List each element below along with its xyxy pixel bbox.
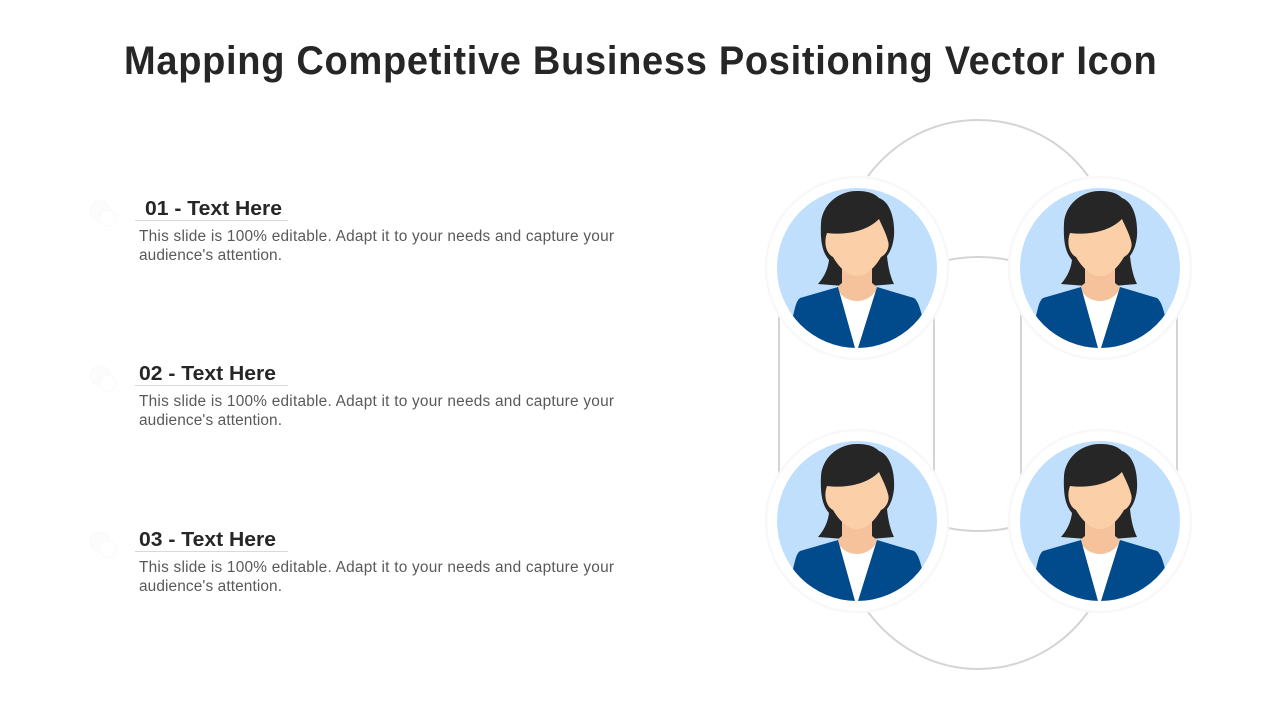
body text 1: This slide is 100% editable. Adapt it to your needs and capture your — [139, 228, 614, 245]
body text 3: This slide is 100% editable. Adapt it to your needs and capture your — [139, 559, 614, 576]
body text 3: audience's attention. — [139, 578, 282, 595]
heading 3: 03 - Text Here — [139, 529, 276, 551]
title: Mapping Competitive Business Positioning Vector Icon — [124, 39, 1157, 83]
text block 2 — [90, 363, 614, 429]
icon: faint bullet 1 — [90, 201, 116, 226]
text block 1 — [90, 198, 614, 264]
avatar: bottom left — [777, 441, 949, 612]
body text 1: audience's attention. — [139, 247, 282, 264]
heading 2: 02 - Text Here — [139, 363, 276, 385]
avatar: bottom right — [1008, 441, 1180, 612]
body text 3 — [139, 559, 614, 595]
connector lines — [779, 120, 1177, 669]
text block 3 — [90, 529, 614, 595]
icon: faint bullet 2 — [90, 366, 116, 391]
body text 2: This slide is 100% editable. Adapt it to your needs and capture your — [139, 393, 614, 410]
body text 1 — [139, 228, 614, 264]
icon: faint bullet 3 — [90, 532, 116, 557]
avatar: top left — [777, 188, 949, 348]
body text 2 — [139, 393, 614, 429]
heading 1: 01 - Text Here — [145, 198, 282, 220]
avatar: top right — [1008, 188, 1180, 348]
body text 2: audience's attention. — [139, 412, 282, 429]
